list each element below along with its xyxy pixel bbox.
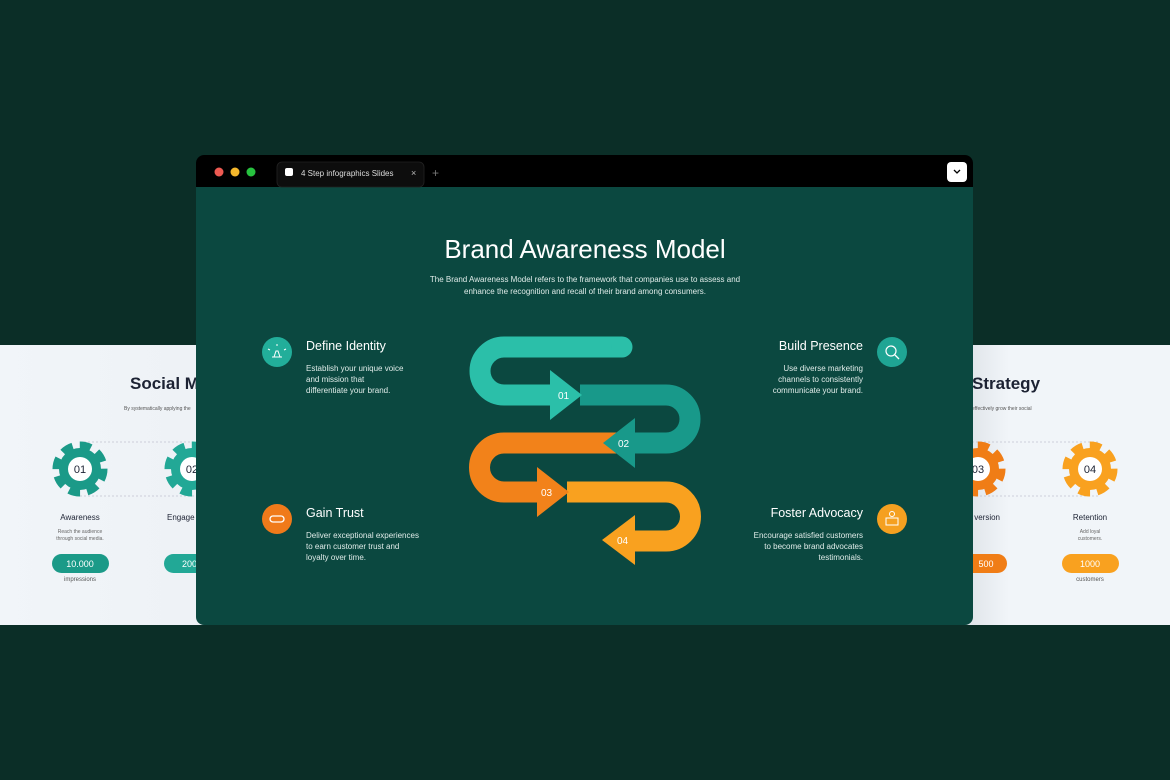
panel: background slide right: Add loyal — [1080, 529, 1100, 535]
step: Build Presence: channels to consistently — [778, 375, 863, 384]
step: Build Presence: Use diverse marketing — [783, 364, 863, 373]
panel: background slide right: Retention — [1073, 513, 1107, 522]
panel: background slide left: Reach the audience — [58, 529, 102, 535]
panel: background slide right: customers. — [1078, 536, 1102, 542]
arrowhead 01 — [550, 370, 582, 420]
subtitle — [430, 275, 740, 296]
subtitle: The Brand Awareness Model refers to the framework that companies use to assess and — [430, 275, 740, 284]
browser title bar: 4 Step infographics Slides — [301, 169, 394, 178]
icon: gear 04 — [1067, 446, 1113, 492]
step: Gain Trust: Gain Trust — [306, 506, 364, 520]
step: Foster Advocacy: testimonials. — [819, 553, 863, 562]
arrowhead 04: 04 — [617, 536, 629, 547]
panel: background slide left: Engage — [167, 513, 195, 522]
title: Brand Awareness Model — [444, 234, 726, 264]
step: Define Identity: Establish your unique voice — [306, 364, 404, 373]
panel: browser window — [196, 155, 973, 625]
step: Gain Trust: to earn customer trust and — [306, 542, 399, 551]
icon: gear 04: 04 — [1084, 464, 1096, 476]
icon: gear 02 — [169, 446, 215, 492]
panel: background slide left: Awareness — [60, 513, 100, 522]
panel: background slide right: effectively grow their social — [972, 406, 1032, 412]
browser title bar: + — [432, 166, 439, 180]
step: Foster Advocacy: Foster Advocacy — [771, 506, 864, 520]
subtitle: enhance the recognition and recall of their brand among consumers. — [464, 287, 706, 296]
arrowhead 03: 03 — [541, 488, 553, 499]
panel: background slide left: through social media. — [56, 536, 104, 542]
arrowhead 02: 02 — [618, 439, 630, 450]
step: Foster Advocacy — [754, 504, 907, 562]
icon: gear 01 — [57, 446, 103, 492]
panel: background slide right: 1000 — [1080, 559, 1100, 569]
panel: background slide right — [940, 345, 1170, 625]
panel: background slide right: 500 — [978, 559, 994, 569]
chart: snake arrow 4 steps — [480, 336, 690, 565]
step: Build Presence: Build Presence — [779, 339, 863, 353]
step: Define Identity: and mission that — [306, 375, 365, 384]
step: Gain Trust — [262, 504, 419, 562]
step: Foster Advocacy: Encourage satisfied customers — [754, 531, 863, 540]
icon: gear 01: 01 — [74, 464, 86, 476]
arrowhead 03 — [537, 467, 569, 517]
panel: background slide left — [0, 345, 260, 625]
panel: background slide left: By systematically applying the — [124, 406, 191, 412]
icon: gear 03 — [955, 446, 1001, 492]
step: Build Presence: communicate your brand. — [773, 386, 863, 395]
icon: gear 03: 03 — [972, 464, 984, 476]
step: Gain Trust: loyalty over time. — [306, 553, 366, 562]
browser title bar: × — [411, 168, 416, 178]
step: Define Identity — [262, 337, 404, 395]
step: Define Identity: Define Identity — [306, 339, 387, 353]
heading: Strategy: Strategy — [972, 374, 1041, 393]
step: Foster Advocacy: to become brand advocates — [764, 542, 863, 551]
panel: background slide left: impressions — [64, 577, 96, 583]
panel: background slide right: customers — [1076, 577, 1104, 583]
step: Build Presence — [773, 337, 907, 395]
heading: Social Media: Social M — [130, 374, 199, 393]
icon: gear 02: 02 — [186, 464, 198, 476]
browser title bar — [196, 155, 973, 187]
panel: background slide right: version — [974, 513, 1000, 522]
panel: background slide left: 200 — [182, 559, 197, 569]
step: Gain Trust: Deliver exceptional experiences — [306, 531, 419, 540]
arrowhead 04 — [602, 515, 635, 565]
step: Define Identity: differentiate your brand. — [306, 386, 390, 395]
panel: background slide left: 10.000 — [66, 559, 94, 569]
arrowhead 02 — [603, 418, 635, 468]
arrowhead 01: 01 — [558, 391, 570, 402]
